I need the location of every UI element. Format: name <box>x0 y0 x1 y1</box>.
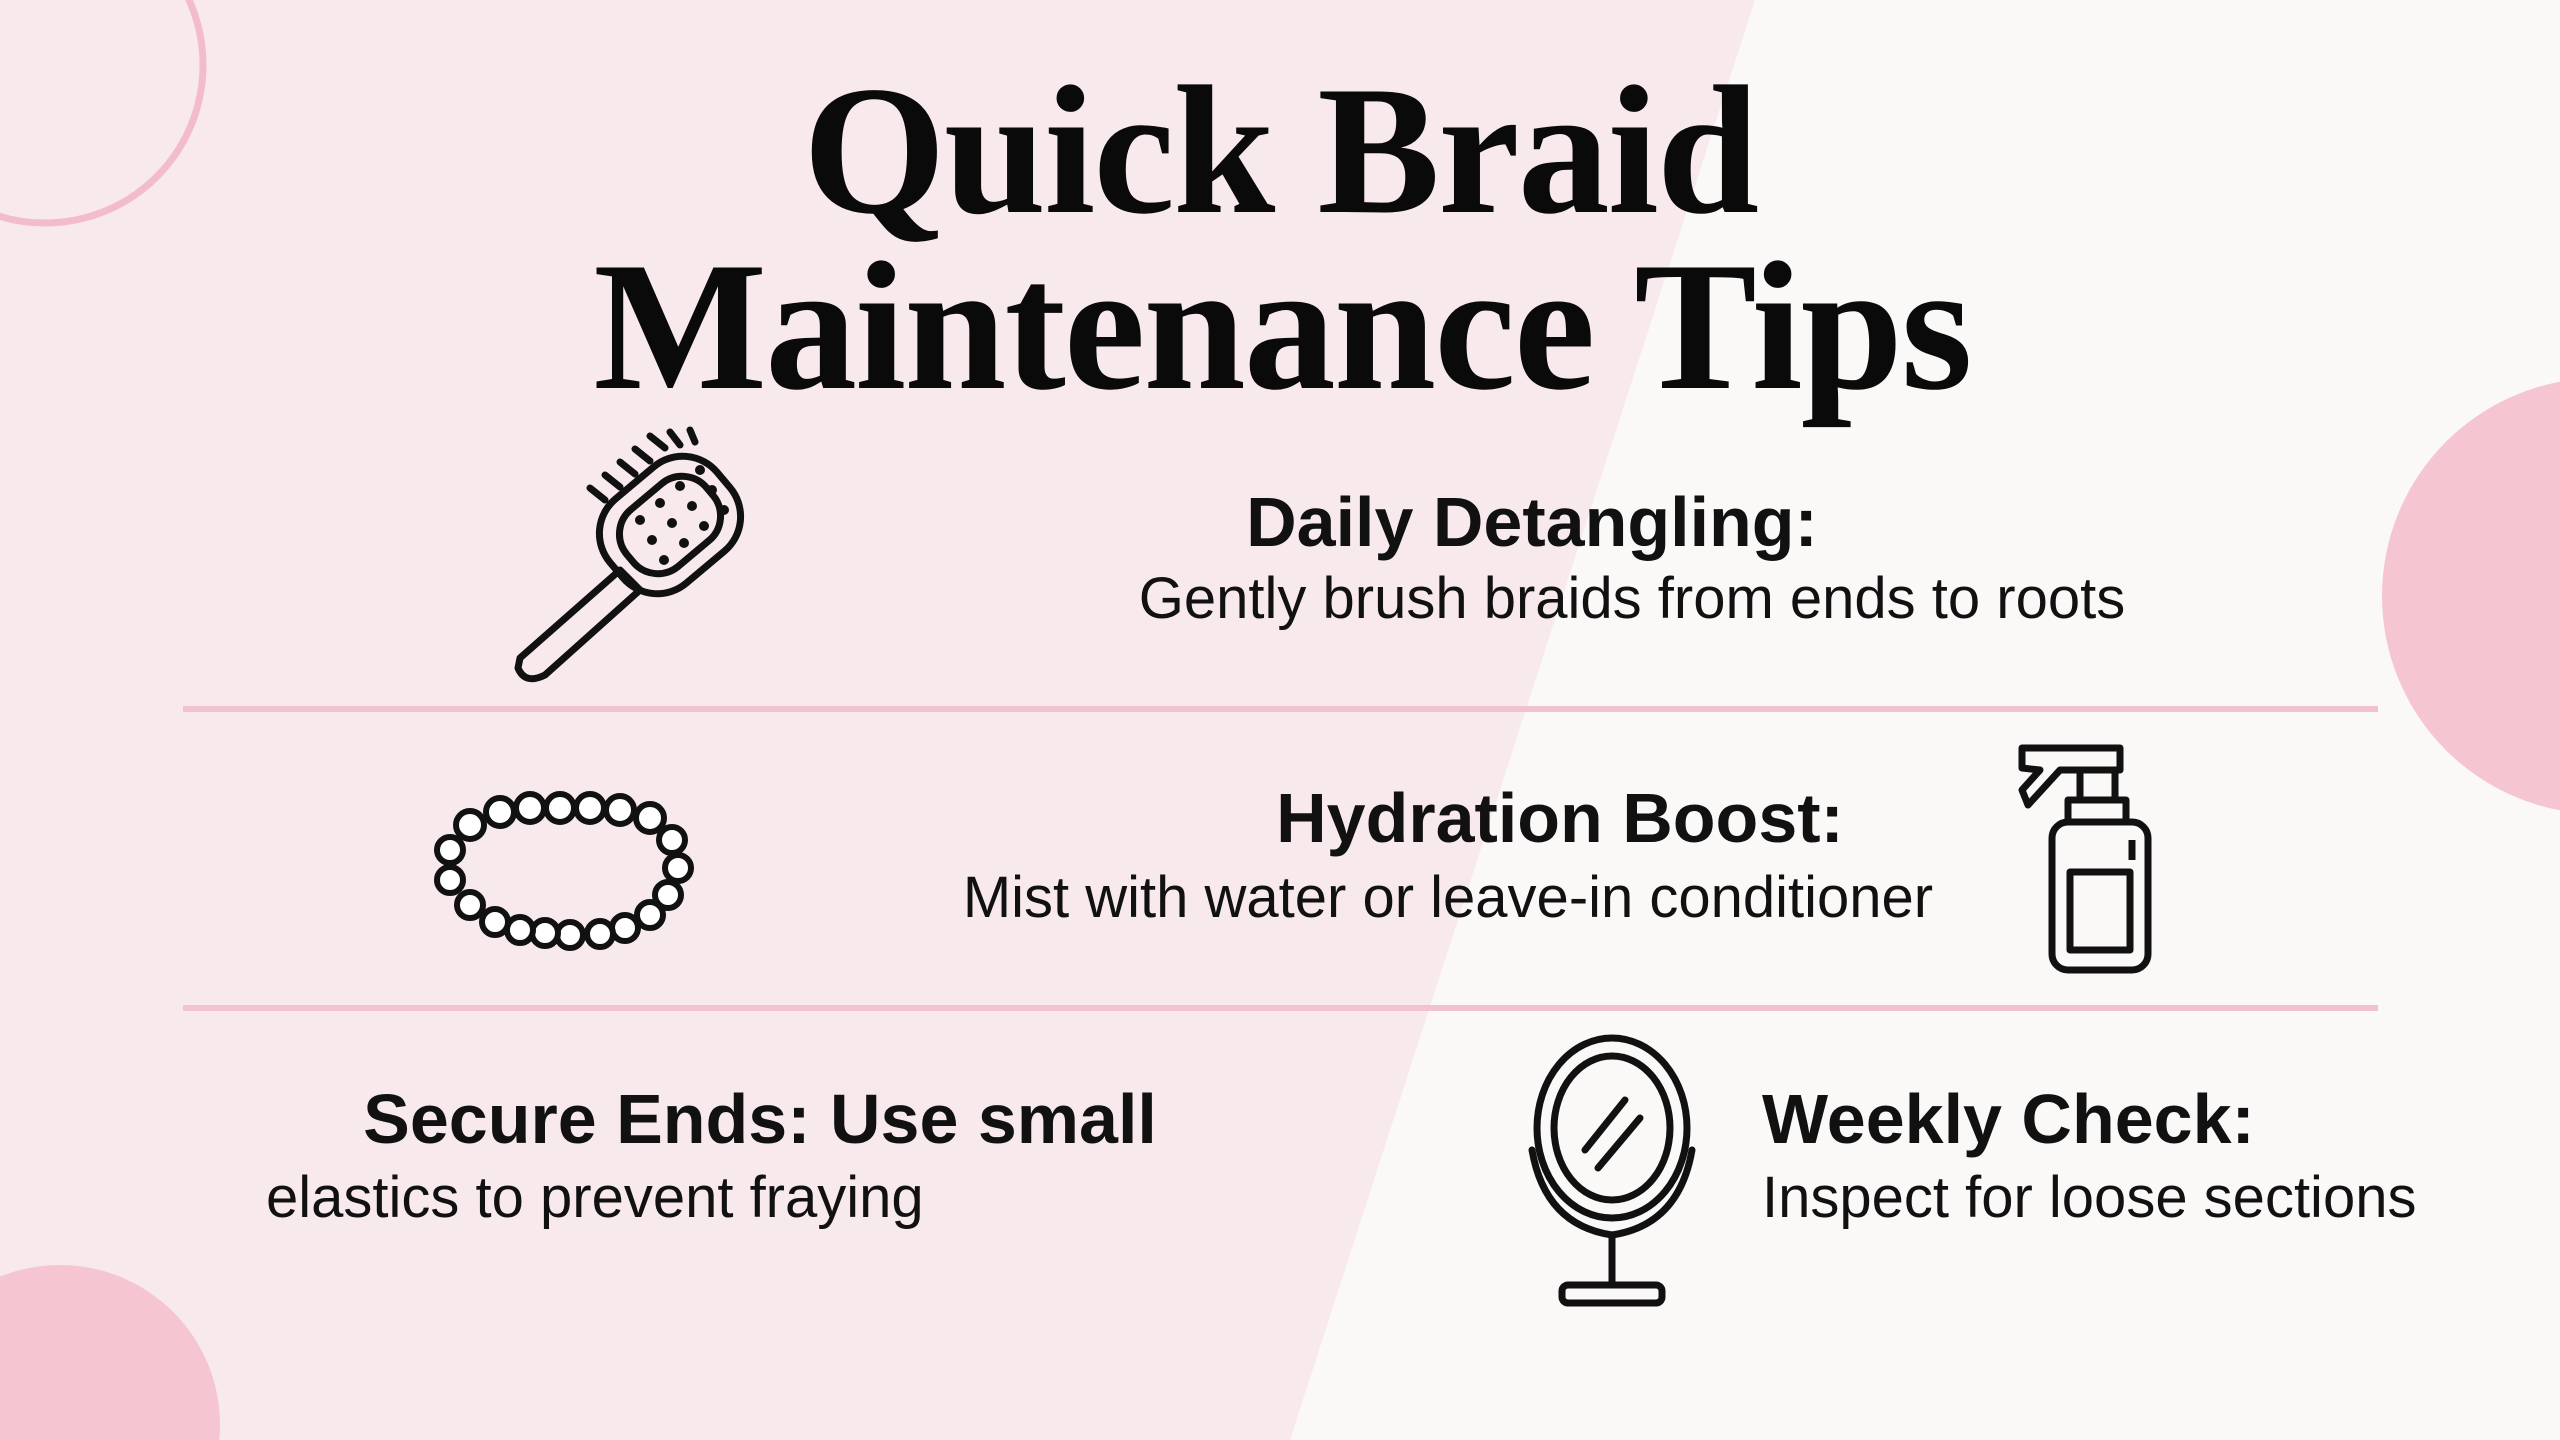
tip: hydration boost <box>963 779 1933 930</box>
icon: scrunchie <box>437 794 691 948</box>
tip: daily detangling <box>1139 483 2125 631</box>
decorative circle bottom-left <box>0 1265 220 1440</box>
icon: hair brush <box>518 430 759 679</box>
title <box>593 48 1971 428</box>
tip: daily detangling: Daily Detangling: <box>1246 483 1818 561</box>
tip: weekly check: Inspect for loose sections <box>1762 1165 2416 1230</box>
tip: secure ends <box>266 1080 1157 1230</box>
title: Quick Braid <box>803 48 1758 252</box>
icon: mirror <box>1532 1038 1692 1303</box>
title: Maintenance Tips <box>593 224 1971 428</box>
tip: weekly check: Weekly Check: <box>1762 1080 2255 1158</box>
tip: secure ends: Secure Ends: Use small <box>363 1080 1157 1158</box>
tip: weekly check <box>1762 1080 2416 1230</box>
icon: spray bottle <box>2022 748 2148 970</box>
decorative ring top-left <box>0 0 203 223</box>
tip: hydration boost: Hydration Boost: <box>1276 779 1844 857</box>
tip: secure ends: elastics to prevent fraying <box>266 1165 924 1230</box>
tip: daily detangling: Gently brush braids from ends to roots <box>1139 566 2125 631</box>
tip: hydration boost: Mist with water or leave-in conditioner <box>963 865 1933 930</box>
decorative circle right <box>2382 378 2560 814</box>
